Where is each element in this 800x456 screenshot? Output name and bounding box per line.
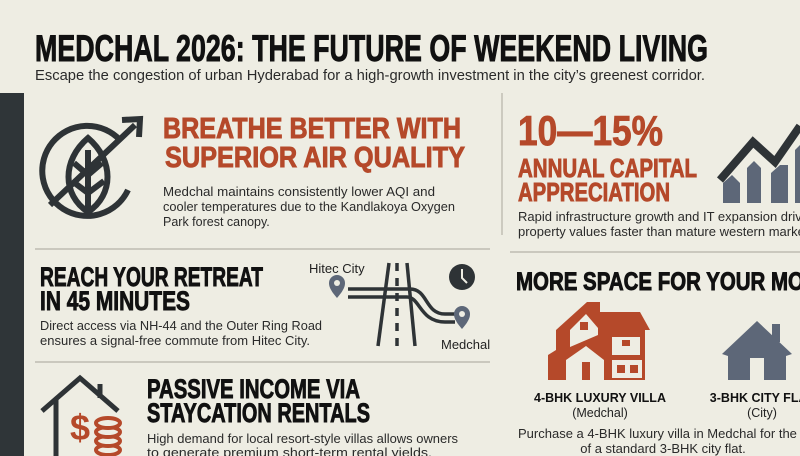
icon: leaf with arrow [42,119,140,216]
heading: BREATHE BETTER WITH [163,113,461,145]
body text [40,318,322,348]
icon: road map [309,261,490,352]
heading: PASSIVE INCOME VIA [147,374,360,404]
icon: house with money: $ [70,407,90,448]
body text [163,185,455,229]
panel: more space [516,268,800,456]
panel: more space: (City) [747,406,777,420]
icon: road map: Hitec City [309,261,365,276]
panel: more space: of a standard 3-BHK city flat. [580,441,746,456]
panel: more space: (Medchal) [572,406,628,420]
panel: capital appreciation: APPRECIATION [518,177,670,207]
subtitle: Escape the congestion of urban Hyderabad for a high-growth investment in the city’s greenest corridor. [35,67,705,84]
left sidebar bar [0,93,24,456]
panel: air quality: SUPERIOR AIR QUALITY [165,142,465,174]
panel: commute: IN 45 MINUTES [40,286,190,316]
panel: passive income [42,374,458,456]
label: villa: 4-BHK LUXURY VILLA [534,391,666,405]
big stat: 10—15% [518,107,663,154]
body text: Medchal maintains consistently lower AQI and [163,185,435,199]
body text: cooler temperatures due to the Kandlakoya Oxygen [163,200,455,214]
icon: villa [548,302,650,380]
icon: city flat [722,321,792,380]
body text [518,209,800,239]
body text [147,431,458,456]
icon: growth chart [720,126,800,203]
panel: commute [40,261,490,352]
heading: REACH YOUR RETREAT [40,262,263,292]
icon: house with money [42,378,120,456]
body text: ensures a signal-free commute from Hitec City. [40,333,310,348]
panel: passive income: STAYCATION RENTALS [147,398,370,428]
body text: Park forest canopy. [163,215,270,229]
panel: capital appreciation [518,107,800,239]
body text: High demand for local resort-style villas allows owners [147,431,458,446]
panel: air quality [42,113,465,229]
body text: Direct access via NH-44 and the Outer Ring Road [40,318,322,333]
icon: road map: Medchal [441,337,490,352]
heading: ANNUAL CAPITAL [518,153,697,183]
